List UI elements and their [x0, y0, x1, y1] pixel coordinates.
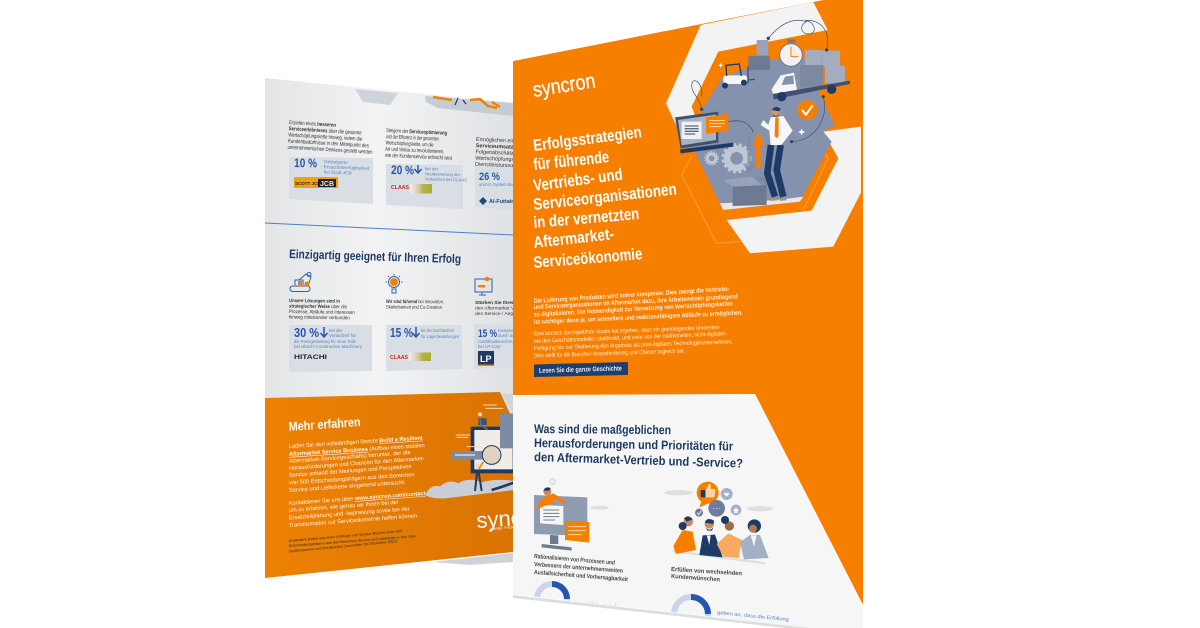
icon: monitor [475, 277, 492, 295]
body text: Aftermarket-Servicegeschäfts) herunter, der die [289, 450, 411, 465]
column 3 strength text: den Aftermarket Vertrieb [475, 306, 528, 312]
intro paragraph: und Serviceorganisationen im Aftermarket dazu, ihre Arbeitsweisen grundlegend [534, 293, 738, 311]
logo: CLAAS: CLAAS [391, 185, 410, 191]
second paragraph: Fertigung hin zur Skalierung des Angebots als post-digitales Technologieunternehmen. [534, 339, 733, 352]
text: Rationalisieren [534, 553, 628, 583]
icon: excavator [290, 272, 311, 292]
connector lines [692, 20, 828, 143]
donut chart left [534, 581, 570, 600]
column 1 intro text: Serviceerlebnisses über die gesamte [289, 126, 362, 137]
body text: Transformation zur Serviceökonomie helfen können. [289, 513, 419, 529]
donut caption right: geben an, dass die Erfüllung [717, 610, 789, 623]
body text: Service anhand der Meinungen und Perspektiven [289, 464, 412, 479]
title: Erfolgsstrategien [532, 123, 643, 155]
stat caption: Gesteigerte [324, 159, 348, 165]
text: Rationalisieren: Verbessern der unternehmensweiten [534, 561, 623, 575]
second paragraph [534, 325, 733, 359]
stat card: 15 % lead [386, 325, 462, 371]
title: Serviceökonomie [533, 245, 643, 272]
column 3 intro text: Dienstleistungsportfolio [475, 162, 531, 170]
stat caption: bei der [329, 328, 343, 333]
logo: syncron white: change. Friction [490, 525, 517, 531]
column 1 strength text: Prozesse, Abläufe und Interessen [289, 309, 355, 316]
body text: von 500 Entscheidungsträgern aus den Bereichen [289, 472, 415, 486]
column 1 intro text [287, 120, 374, 156]
column 1 strength text: hinweg miteinander verbunden [289, 314, 350, 321]
body text [289, 436, 426, 529]
down arrow [412, 327, 420, 337]
stat caption: bei der Durchlaufzeit [421, 328, 455, 333]
gears [705, 144, 751, 172]
icon: lightbulb [386, 274, 402, 293]
back top illustration band [425, 96, 513, 116]
heading: Mehr erfahren: Mehr erfahren [288, 415, 361, 434]
donut chart right [671, 594, 711, 616]
body text: Laden Sie den vollständigen Bericht Build a Resilient [289, 436, 423, 450]
column 1 intro text: Wertschöpfungskette hinweg, indem die [288, 132, 362, 143]
white hexagon ring top [666, 2, 828, 133]
footnote: Großbritannien und Nordeuropa (November bis Dezember 2021) [289, 539, 398, 553]
back blue divider [265, 223, 513, 235]
logo: LP: LP [480, 354, 492, 364]
stat card: 30 % [289, 325, 372, 372]
stat caption [425, 166, 468, 183]
button: Lesen Sie die ganze Geschichte [539, 365, 622, 375]
badge: check [797, 100, 817, 120]
stat caption: bei Scott-JCB [324, 169, 352, 175]
orange section: Mehr erfahren [265, 392, 554, 578]
stat value: 26 % [479, 171, 500, 183]
logo: syncron white: syncron [476, 503, 554, 533]
stat value: 10 % [294, 156, 317, 170]
intro paragraph: Die Lieferung von Produkten wird immer komplexer. Dies zwingt die Vertriebs- [534, 286, 730, 305]
floor [720, 197, 803, 210]
title: Serviceorganisationen [532, 180, 678, 214]
column 3 strength text: Stärken Sie Ihren Fokus [475, 300, 531, 306]
heading: challenges: Herausforderungen und Prioritäten für [534, 436, 733, 453]
stat card: 15 % cost [474, 324, 519, 369]
column 3 intro text: Folgenabschätzung der gesamten [475, 149, 557, 159]
front page bottom shadow [513, 595, 810, 628]
body text: um zu erfahren, wie genau wir Ihnen bei der [289, 500, 399, 514]
column 2 intro text: wie der Kundenservice erbracht wird [384, 153, 452, 162]
column 2 strength text: Wir sind führend bei Innovation, [386, 299, 444, 305]
heading: challenges [534, 424, 742, 468]
second paragraph: bei den Geschäftsmodellen stattfindet, und zwar von der traditionellen, nicht-digitalen [534, 331, 726, 345]
column 3 intro text: Wertschöpfungskette, um die [475, 156, 545, 164]
text: Erfüllen: Kundenwünschen [671, 573, 720, 583]
column 2 intro text: Steigern der Serviceoptimierung [386, 128, 447, 137]
stat caption [324, 159, 370, 176]
body text: Service und Lieferkette eingehend untersucht. [289, 480, 406, 494]
column 1 intro text: unternehmerischen Denkens gestellt werden [287, 145, 373, 156]
title: in der vernetzten [533, 205, 640, 232]
text: Erfüllen [671, 566, 742, 582]
column 3 intro text: Serviceumsatzes durch die [476, 143, 543, 152]
stat caption: durch auf [498, 333, 517, 338]
stat value: 20 % [391, 163, 414, 177]
stat caption: Vorlaufzeit für [329, 333, 356, 338]
front page lower white panel [513, 394, 863, 628]
title: für führende [533, 148, 610, 174]
column 3 intro text: Ermöglichen eines größeren [476, 137, 545, 146]
column 2 intro text [384, 128, 453, 162]
column 1 intro text: Kundenbedürfnisse in den Mittelpunkt des [288, 139, 369, 149]
stat value: 15 % [390, 326, 413, 340]
donut caption left: Geschäftliche Vorteile [573, 600, 619, 609]
stat card: 26 % [475, 167, 516, 210]
stat caption: Cashflowberechnung [478, 339, 519, 344]
column 3 strength text [475, 300, 531, 317]
title [532, 123, 678, 272]
truck [772, 73, 850, 101]
intro paragraph [534, 286, 743, 326]
text: Rationalisieren: Rationalisieren von Prozessen und [534, 553, 615, 567]
stat card: 10 % [289, 156, 373, 204]
forklift [722, 64, 755, 89]
heading: challenges: Was sind die maßgeblichen [534, 422, 671, 437]
column 2 intro text: und der Effizienz in der gesamten [386, 134, 439, 143]
illustration: person at monitor [534, 479, 609, 551]
footnote: Entscheidungsträgern aus den Bereichen Service und Lieferkette in den USA, [289, 534, 417, 548]
heading: challenges: den Aftermarket-Vertrieb und -Service? [534, 450, 743, 471]
footnote: (Kollektive Daten aus einer Umfrage von Vanson Bourne unter 500 [289, 529, 403, 543]
stat caption: Kostenein [498, 328, 518, 333]
illustration: monitor with magnifier [425, 405, 515, 498]
column 1 strength text [289, 298, 355, 321]
stat caption: und im System bei [479, 182, 514, 187]
body text: Herausforderungen und Chancen für den Aftermarket- [289, 456, 425, 472]
column 2 strength text: Skalierbarkeit und Co-Creation [386, 304, 442, 311]
column 2 strength text [386, 299, 444, 311]
stat caption: bei der [425, 166, 439, 171]
stacked boxes [748, 40, 845, 87]
body text: Aftermarket Service Business (Aufbau eines stabilen [289, 443, 425, 458]
title: Aftermarket- [532, 225, 615, 252]
column 3 intro text [475, 137, 558, 171]
thin hexagon outline left [682, 157, 743, 243]
stat caption: Neubewertung der [425, 171, 461, 177]
front page [513, 0, 863, 628]
logo: syncron: syncron [531, 69, 597, 102]
back page [265, 78, 558, 578]
stat caption: bei Hitachi Construction Machinery [294, 344, 363, 349]
laptop [675, 112, 733, 153]
body text: Kontaktieren Sie uns über www.syncron.com/contact [289, 491, 426, 507]
second paragraph: Dies stellt für die Branche Herausforderung und Chance zugleich dar. [534, 348, 685, 359]
man [761, 107, 793, 200]
front page orange cover [513, 0, 863, 605]
thin hexagon outline right [803, 148, 828, 210]
second paragraph: Eine kürzlich durchgeführte Studie hat ergeben, dass ein grundlegendes Umdenken [534, 325, 720, 337]
open box [723, 177, 782, 206]
stat caption: die Preisgestaltung für neue Teile [294, 339, 357, 344]
logo: CLAAS: CLAAS [390, 355, 409, 361]
white hexagon ring bottom right [727, 127, 861, 253]
logo: Scott JCB [294, 177, 338, 188]
stat caption: Ersatzteilverfügbarkeit [324, 164, 370, 171]
stat caption [478, 328, 519, 349]
illustration: team with speech bubbles [664, 482, 773, 563]
logo: Al-Futtaim: Al-Futtaim [489, 199, 516, 205]
stat caption [421, 328, 460, 339]
heading: Einzigartig: Einzigartig geeignet für Ihren Erfolg [289, 247, 461, 266]
stat caption: Vorlaufzeit bei CLAAS [425, 176, 467, 183]
column 2 intro text: Art und Weise zu revolutionieren, [385, 147, 445, 155]
back page background [265, 78, 513, 578]
logo: Scott JCB: SCOTT JCB [295, 181, 321, 186]
stat caption: bei LP Corp [478, 344, 501, 349]
grey hexagon [692, 57, 835, 210]
column 1 strength text: strategischer Weise über die [289, 303, 347, 310]
arrow up [742, 132, 765, 170]
body text: Ersatzteilplanung und -bepreisung sowie bei der [289, 506, 410, 521]
stat caption [294, 328, 363, 349]
stat card: 20 % [386, 163, 468, 209]
down arrow [320, 327, 328, 337]
stat value: 15 % [478, 328, 497, 340]
intro paragraph: ist wichtiger denn je, um schnellere und reaktionsfähigere Abläufe zu ermöglichen. [534, 310, 743, 326]
footnote [289, 529, 417, 553]
stopwatch [780, 39, 802, 66]
sparkles [718, 63, 805, 136]
column 3 strength text: des Service / Angebots [475, 311, 526, 317]
logo: Hitachi: HITACHI [294, 354, 327, 361]
grey strip bottom [432, 553, 513, 565]
column 1 strength text: Unsere Lösungen sind in [289, 298, 340, 305]
button [534, 362, 628, 377]
stat caption: für Lagerbestellungen [421, 334, 460, 339]
text: Erfüllen: Erfüllen von wechselnden [671, 566, 742, 577]
back top notch [355, 89, 398, 105]
title: Vertriebs- und [532, 166, 624, 195]
hero illustration [666, 2, 861, 253]
text: Rationalisieren: Ausfallsicherheit und Vorhersagbarkeit [534, 569, 628, 583]
column 2 intro text: Wertschöpfungskette, um die [385, 140, 434, 149]
column 1 intro text: Erzielen eines besseren [289, 120, 336, 129]
logo: Scott JCB: JCB [320, 181, 334, 188]
intro paragraph: zu digitalisieren. Die Notwendigkeit zur Vernetzung von Wertschöpfungsketten [534, 300, 733, 318]
grey corner top right [502, 394, 513, 413]
stat value: 30 % [294, 325, 319, 340]
down arrow [414, 165, 422, 173]
